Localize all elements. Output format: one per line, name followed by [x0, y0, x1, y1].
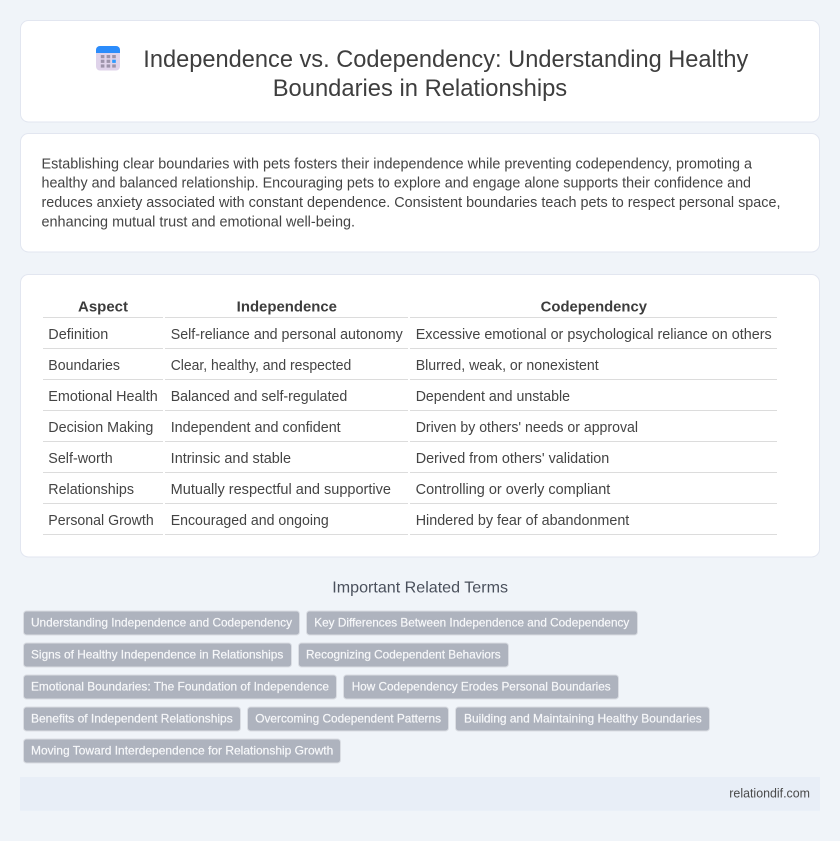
row: Decision Making: Independent and confident — [171, 420, 341, 436]
text block: description: healthy and balanced relationship. Encouraging pets to explore and engage alone supports their confidence and — [42, 176, 751, 192]
tag — [24, 643, 292, 667]
text block: description — [42, 156, 780, 230]
heading: related terms: Important Related Terms — [332, 580, 508, 597]
tag: Recognizing Codependent Behaviors — [306, 648, 501, 662]
tag — [456, 707, 710, 731]
tag — [306, 611, 638, 635]
title — [143, 46, 748, 102]
icon: calendar — [96, 46, 120, 70]
row: Definition: Self-reliance and personal autonomy — [171, 327, 403, 343]
tag — [344, 675, 618, 699]
row: Boundaries: Blurred, weak, or nonexistent — [416, 358, 599, 374]
tag: Moving Toward Interdependence for Relationship Growth — [31, 744, 333, 758]
tag — [24, 675, 336, 699]
row: Personal Growth: Encouraged and ongoing — [171, 513, 329, 529]
row: Self-worth: Derived from others' validation — [416, 451, 609, 467]
title: Independence vs. Codependency: Understanding Healthy — [143, 46, 748, 73]
text block: description: enhancing mutual trust and emotional well-being. — [42, 214, 355, 230]
footer source: relationdif.com — [729, 786, 810, 801]
row: Decision Making: Decision Making — [48, 420, 153, 436]
row: Emotional Health: Emotional Health — [48, 389, 158, 405]
row: Personal Growth — [43, 513, 777, 535]
footer — [20, 777, 820, 811]
row: Emotional Health: Balanced and self-regulated — [171, 389, 347, 405]
text block: description: reduces anxiety associated with constant dependence. Consistent boundaries teach pets to respect personal space, — [42, 195, 780, 211]
table header: Aspect — [78, 300, 128, 316]
row: Relationships: Controlling or overly compliant — [416, 482, 610, 498]
tag: Signs of Healthy Independence in Relationships — [31, 648, 283, 662]
row: Emotional Health: Dependent and unstable — [416, 389, 570, 405]
row: Definition: Definition — [48, 327, 108, 343]
row: Boundaries — [43, 358, 777, 380]
row: Boundaries: Clear, healthy, and respected — [171, 358, 351, 374]
table header — [43, 300, 777, 318]
tag — [24, 739, 340, 763]
row: Relationships: Relationships — [48, 482, 134, 498]
row: Emotional Health — [43, 389, 777, 411]
panel: description — [20, 134, 820, 252]
row: Personal Growth: Personal Growth — [48, 513, 154, 529]
text block: description: Establishing clear boundaries with pets fosters their independence while preventing codependency, promoting a — [42, 156, 752, 172]
tags: related terms — [24, 611, 710, 763]
tag — [24, 707, 240, 731]
row: Relationships: Mutually respectful and supportive — [171, 482, 391, 498]
table header: Independence — [237, 300, 337, 316]
tag — [248, 707, 448, 731]
tag: How Codependency Erodes Personal Boundaries — [352, 680, 611, 694]
tag: Benefits of Independent Relationships — [31, 712, 233, 726]
tag: Key Differences Between Independence and Codependency — [314, 616, 629, 630]
table header: Codependency — [541, 300, 647, 316]
tag: Building and Maintaining Healthy Boundaries — [464, 712, 702, 726]
panel: header — [20, 20, 820, 122]
panel: comparison table — [20, 274, 820, 557]
row: Definition: Excessive emotional or psychological reliance on others — [416, 327, 772, 343]
row: Relationships — [43, 482, 777, 504]
row: Self-worth: Self-worth — [48, 451, 113, 467]
row: Self-worth: Intrinsic and stable — [171, 451, 291, 467]
row: Boundaries: Boundaries — [48, 358, 120, 374]
title: Boundaries in Relationships — [273, 75, 567, 102]
row: Personal Growth: Hindered by fear of abandonment — [416, 513, 629, 529]
tag: Understanding Independence and Codependency — [31, 616, 292, 630]
tag: Emotional Boundaries: The Foundation of Independence — [31, 680, 329, 694]
row: Self-worth — [43, 451, 777, 473]
row: Decision Making: Driven by others' needs or approval — [416, 420, 638, 436]
row: Decision Making — [43, 420, 777, 442]
tag: Overcoming Codependent Patterns — [255, 712, 441, 726]
tag — [24, 611, 300, 635]
tag — [298, 643, 508, 667]
row: Definition — [43, 327, 777, 349]
